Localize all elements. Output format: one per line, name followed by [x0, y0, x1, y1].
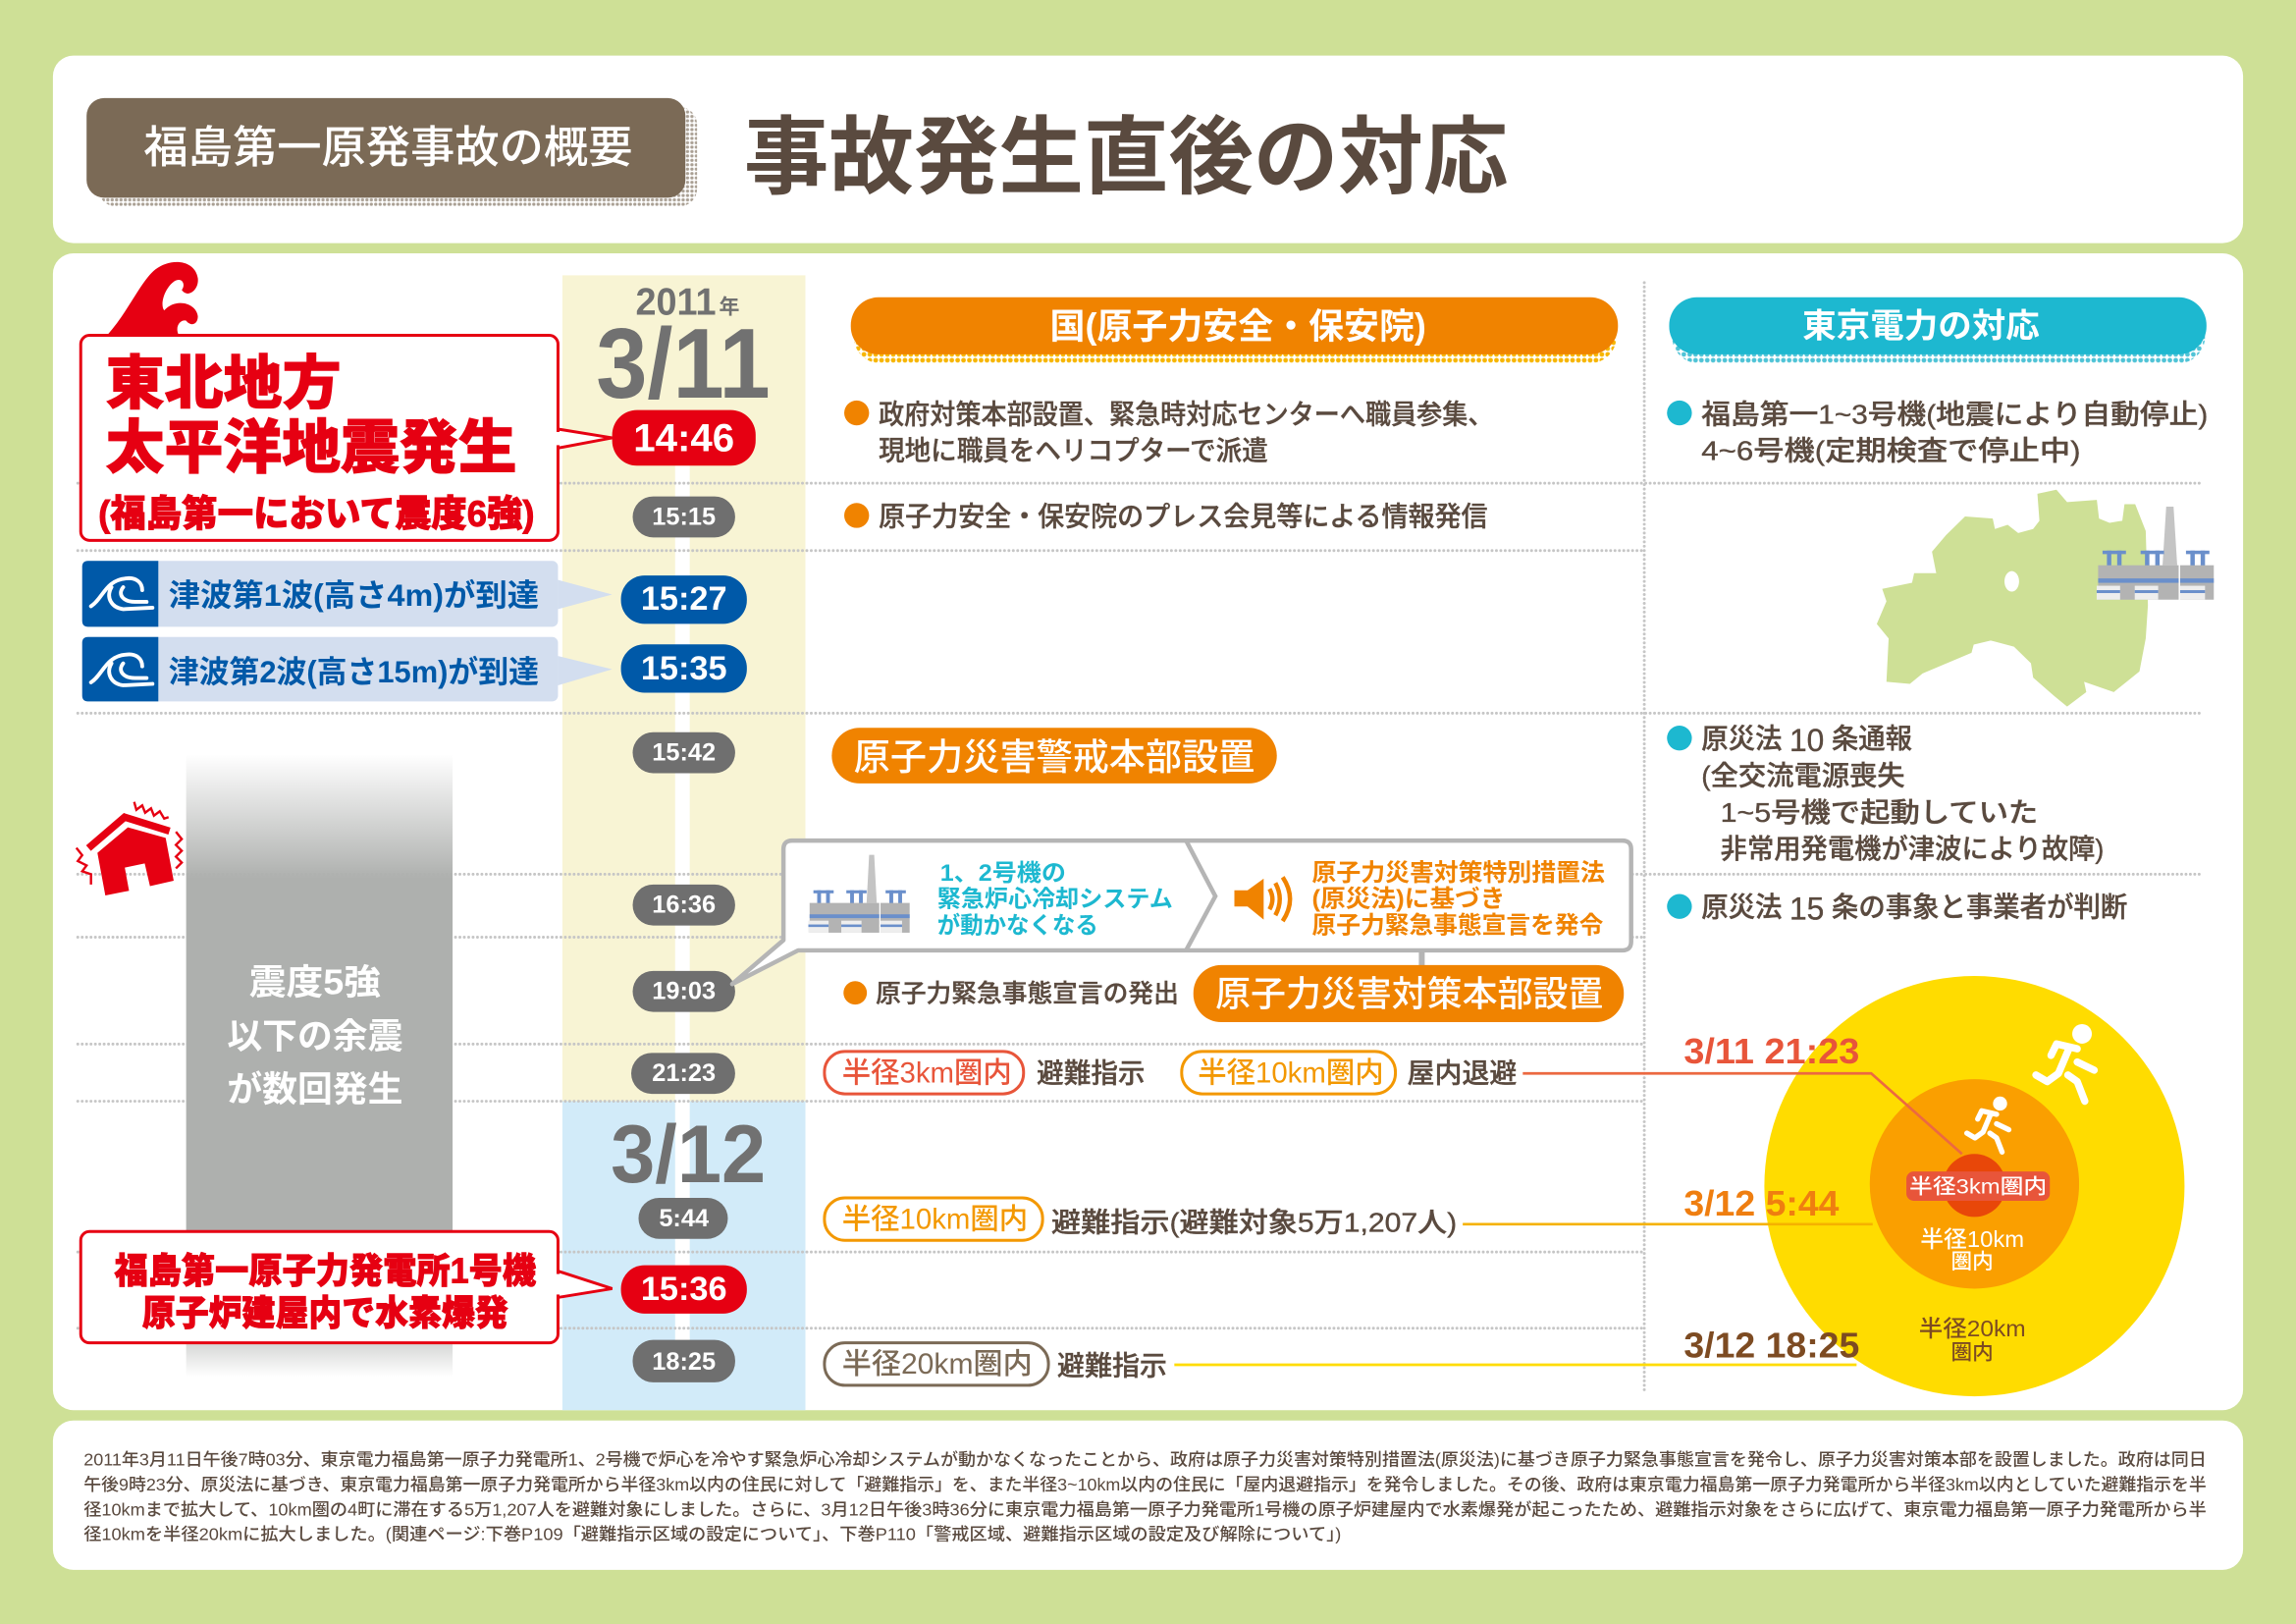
time pill 16:36: 16:36 [652, 892, 716, 919]
label: 20km zone: 圏内 [1951, 1340, 1994, 1365]
date: 3/12: 3/12 [611, 1108, 766, 1200]
time pill 15:27: 15:27 [641, 580, 727, 618]
pill: alert headquarters [831, 728, 1277, 784]
heading: government: 国(原子力安全・保安院) [1050, 306, 1426, 346]
row 21:23: evacuation 3km: 避難指示 [1037, 1057, 1146, 1088]
time pill 15:36: 15:36 [641, 1271, 727, 1308]
icon: small runner [1967, 1097, 2008, 1152]
TEPCO item: Article 10 notification: (全交流電源喪失 [1701, 761, 1905, 791]
badge: overview label: 福島第一原発事故の概要 [143, 123, 633, 172]
time pill 18:25 [633, 1340, 735, 1382]
connector to headquarters pill [1418, 950, 1424, 968]
date label 3/12 5:44: 3/12 5:44 [1683, 1184, 1840, 1223]
date: 3/11: 3/11 [596, 308, 771, 419]
TEPCO item: units status [1667, 399, 2208, 466]
badge: overview label [86, 98, 697, 206]
row 18:25: evacuation 20km: 避難指示 [1057, 1351, 1167, 1381]
row 5:44: evacuation 10km: 避難指示(避難対象5万1,207人) [1051, 1208, 1457, 1238]
leader line: 3km [1522, 1073, 1962, 1154]
callout: earthquake: 東北地方 [106, 351, 342, 416]
label: 3km zone: 半径3km圏内 [1909, 1176, 2047, 1199]
orange text: declaration [1312, 859, 1605, 940]
orange text: declaration: 原子力緊急事態宣言を発令 [1312, 912, 1604, 940]
time pill 15:15 [633, 497, 735, 537]
time pill 15:27 [621, 575, 747, 623]
icon: plant on map [2097, 507, 2214, 600]
government item: headquarters: 現地に職員をヘリコプターで派遣 [879, 436, 1268, 466]
label: 10km zone [1920, 1226, 2024, 1273]
row 18:25: evacuation 20km [825, 1343, 1167, 1385]
government item: press: 原子力安全・保安院のプレス会見等による情報発信 [879, 502, 1488, 532]
time pill 15:35 [621, 644, 747, 692]
icon: shaking house [77, 802, 182, 895]
panel: main timeline [53, 253, 2243, 1410]
time pill 5:44 [638, 1198, 727, 1239]
row 5:44: evacuation 10km: 半径10km圏内 [842, 1204, 1028, 1236]
date column: 3/12 [562, 1102, 806, 1410]
TEPCO item: Article 10 notification [1667, 721, 2104, 864]
teal text: cooling system failure: 緊急炉心冷却システム [937, 887, 1173, 913]
label: 20km zone: 半径20km [1919, 1316, 2026, 1341]
evacuation zone diagram [1174, 976, 2184, 1396]
teal text: cooling system failure [937, 860, 1173, 940]
row 21:23: shelter 10km: 屋内退避 [1407, 1057, 1517, 1088]
panel: header [53, 56, 2243, 244]
orange text: declaration: (原災法)に基づき [1312, 886, 1505, 913]
row 21:23: evacuation 3km: 半径3km圏内 [842, 1056, 1012, 1089]
icon: plant in callout [808, 855, 910, 933]
callout: hydrogen explosion: 福島第一原子力発電所1号機 [115, 1251, 536, 1290]
row 18:25: evacuation 20km: 半径20km圏内 [842, 1348, 1033, 1380]
government item: headquarters [844, 399, 1493, 466]
date: 2011 year: 年 [720, 296, 740, 318]
dotted row lines [78, 283, 2204, 1391]
heading: TEPCO: 東京電力の対応 [1802, 307, 2040, 345]
panel: footer note: 2011年3月11日午後7時03分、東京電力福島第一原子力発電所1、2号機で炉心を冷やす緊急炉心冷却システムが動かなくなったことから、政府は原子力災害対策特別措置法(原災法)に基づき原子力緊急事態宣言を発令し、原子力災害対策本部を設置しました。政府は同日 [83, 1449, 2207, 1470]
tsunami bar 1: 津波第1波(高さ4m)が到達 [169, 577, 539, 613]
time pill 15:15: 15:15 [652, 503, 716, 530]
aftershock text: 以下の余震 [227, 1017, 402, 1056]
aftershock text: 震度5強 [249, 962, 381, 1001]
time pill 14:46: 14:46 [633, 415, 734, 460]
date column: 3/11 [562, 275, 806, 1102]
time pill 14:46 [613, 410, 756, 465]
time pill 21:23: 21:23 [652, 1059, 716, 1087]
label: 10km zone: 圏内 [1951, 1249, 1994, 1273]
government item: headquarters: 政府対策本部設置、緊急時対応センターへ職員参集、 [879, 399, 1493, 429]
panel: footer note: 午後9時23分、原災法に基づき、東京電力福島第一原子力発電所から半径3km以内の住民に対して「避難指示」を、また半径3~10km以内の住民に「屋内退避指示」を発令しました。その後、政府は東京電力福島第一原子力発電所から半径3km以内としていた避難指示を半 [83, 1475, 2207, 1494]
heading: TEPCO [1669, 298, 2207, 363]
icon: tsunami wave [107, 262, 198, 336]
panel: footer note: 径10kmを半径20kmに拡大しました。(関連ページ:下巻P109「避難指示区域の設定について」、下巻P110「警戒区域、避難指示区域の設定及び解除について」) [83, 1525, 1341, 1544]
time pill 21:23 [631, 1053, 735, 1094]
zone: 10km [1870, 1079, 2079, 1288]
time pill 19:03 [633, 971, 735, 1012]
heading: government [851, 298, 1618, 363]
date: 2011 year: 2011 [635, 281, 717, 323]
aftershock band [187, 754, 453, 1377]
panel: footer note: 径10kmまで拡大して、10km圏の4町に滞在する5万1,207人を避難対象にしました。さらに、3月12日午後3時36分に東京電力福島第一原子力発電所1号機の原子炉建屋内で水素爆発が起こったため、避難指示対象をさらに広げて、東京電力福島第一原子力発電所から半 [83, 1498, 2207, 1519]
aftershock text [227, 962, 402, 1109]
callout: earthquake [80, 336, 613, 540]
row 21:23: evacuation 3km [825, 1052, 1146, 1094]
government item: declaration issued: 原子力緊急事態宣言の発出 [876, 979, 1179, 1007]
pill: disaster headquarters [1194, 965, 1624, 1022]
row 5:44: evacuation 10km [825, 1198, 1457, 1240]
map: Fukushima [1877, 490, 2214, 707]
zone: 3km [1943, 1154, 2005, 1217]
leader line: 20km [1174, 1364, 1856, 1366]
tsunami bar 1 [82, 561, 613, 626]
TEPCO item: Article 10 notification: 1~5号機で起動していた [1721, 797, 2038, 828]
pill: disaster headquarters: 原子力災害対策本部設置 [1215, 974, 1603, 1013]
time pill 18:25: 18:25 [652, 1348, 716, 1376]
icon: large runner [2036, 1024, 2094, 1102]
time pill 15:36 [621, 1266, 747, 1314]
date label 3/11 21:23: 3/11 21:23 [1683, 1032, 1859, 1071]
row 21:23: shelter 10km: 半径10km圏内 [1198, 1056, 1384, 1089]
zone: 20km [1764, 976, 2184, 1396]
TEPCO item: units status: 福島第一1~3号機(地震により自動停止) [1701, 399, 2208, 429]
time pill 15:35: 15:35 [641, 650, 727, 687]
panel: footer note [53, 1421, 2243, 1570]
date label 3/12 18:25: 3/12 18:25 [1683, 1326, 1859, 1366]
time pill 16:36 [633, 885, 735, 926]
time pill 19:03: 19:03 [652, 978, 716, 1005]
tsunami bar 2 [82, 637, 613, 701]
tsunami bar 2: 津波第2波(高さ15m)が到達 [169, 654, 539, 689]
time pill 15:42 [633, 732, 735, 773]
timeline stripe [675, 465, 690, 1344]
callout: earthquake: 太平洋地震発生 [106, 415, 517, 481]
time pill 15:42: 15:42 [652, 739, 716, 767]
icon: speaker [1234, 877, 1290, 921]
teal text: cooling system failure: 1、2号機の [940, 860, 1066, 887]
TEPCO item: Article 10 notification: 原災法 10 条通報 [1701, 721, 1912, 757]
label: 10km zone: 半径10km [1920, 1226, 2024, 1252]
leader line: 10km [1463, 1223, 1873, 1225]
row 21:23: shelter 10km [1182, 1052, 1517, 1094]
TEPCO item: Article 10 notification: 非常用発電機が津波により故障) [1721, 834, 2104, 864]
TEPCO item: units status: 4~6号機(定期検査で停止中) [1701, 436, 2081, 466]
orange text: declaration: 原子力災害対策特別措置法 [1312, 859, 1605, 887]
time pill 5:44: 5:44 [659, 1205, 709, 1232]
pill: alert headquarters: 原子力災害警戒本部設置 [854, 736, 1255, 778]
callout: earthquake: (福島第一において震度6強) [98, 493, 535, 534]
callout: hydrogen explosion: 原子炉建屋内で水素爆発 [142, 1294, 508, 1333]
label: 3km zone [1906, 1171, 2050, 1201]
title: 事故発生直後の対応 [744, 111, 1508, 205]
TEPCO item: Article 15: 原災法 15 条の事象と事業者が判断 [1701, 890, 2127, 926]
label: 20km zone [1919, 1316, 2026, 1365]
callout: emergency declaration [732, 840, 1631, 984]
callout: hydrogen explosion [80, 1231, 613, 1343]
teal text: cooling system failure: が動かなくなる [937, 912, 1098, 940]
aftershock text: が数回発生 [227, 1069, 402, 1109]
